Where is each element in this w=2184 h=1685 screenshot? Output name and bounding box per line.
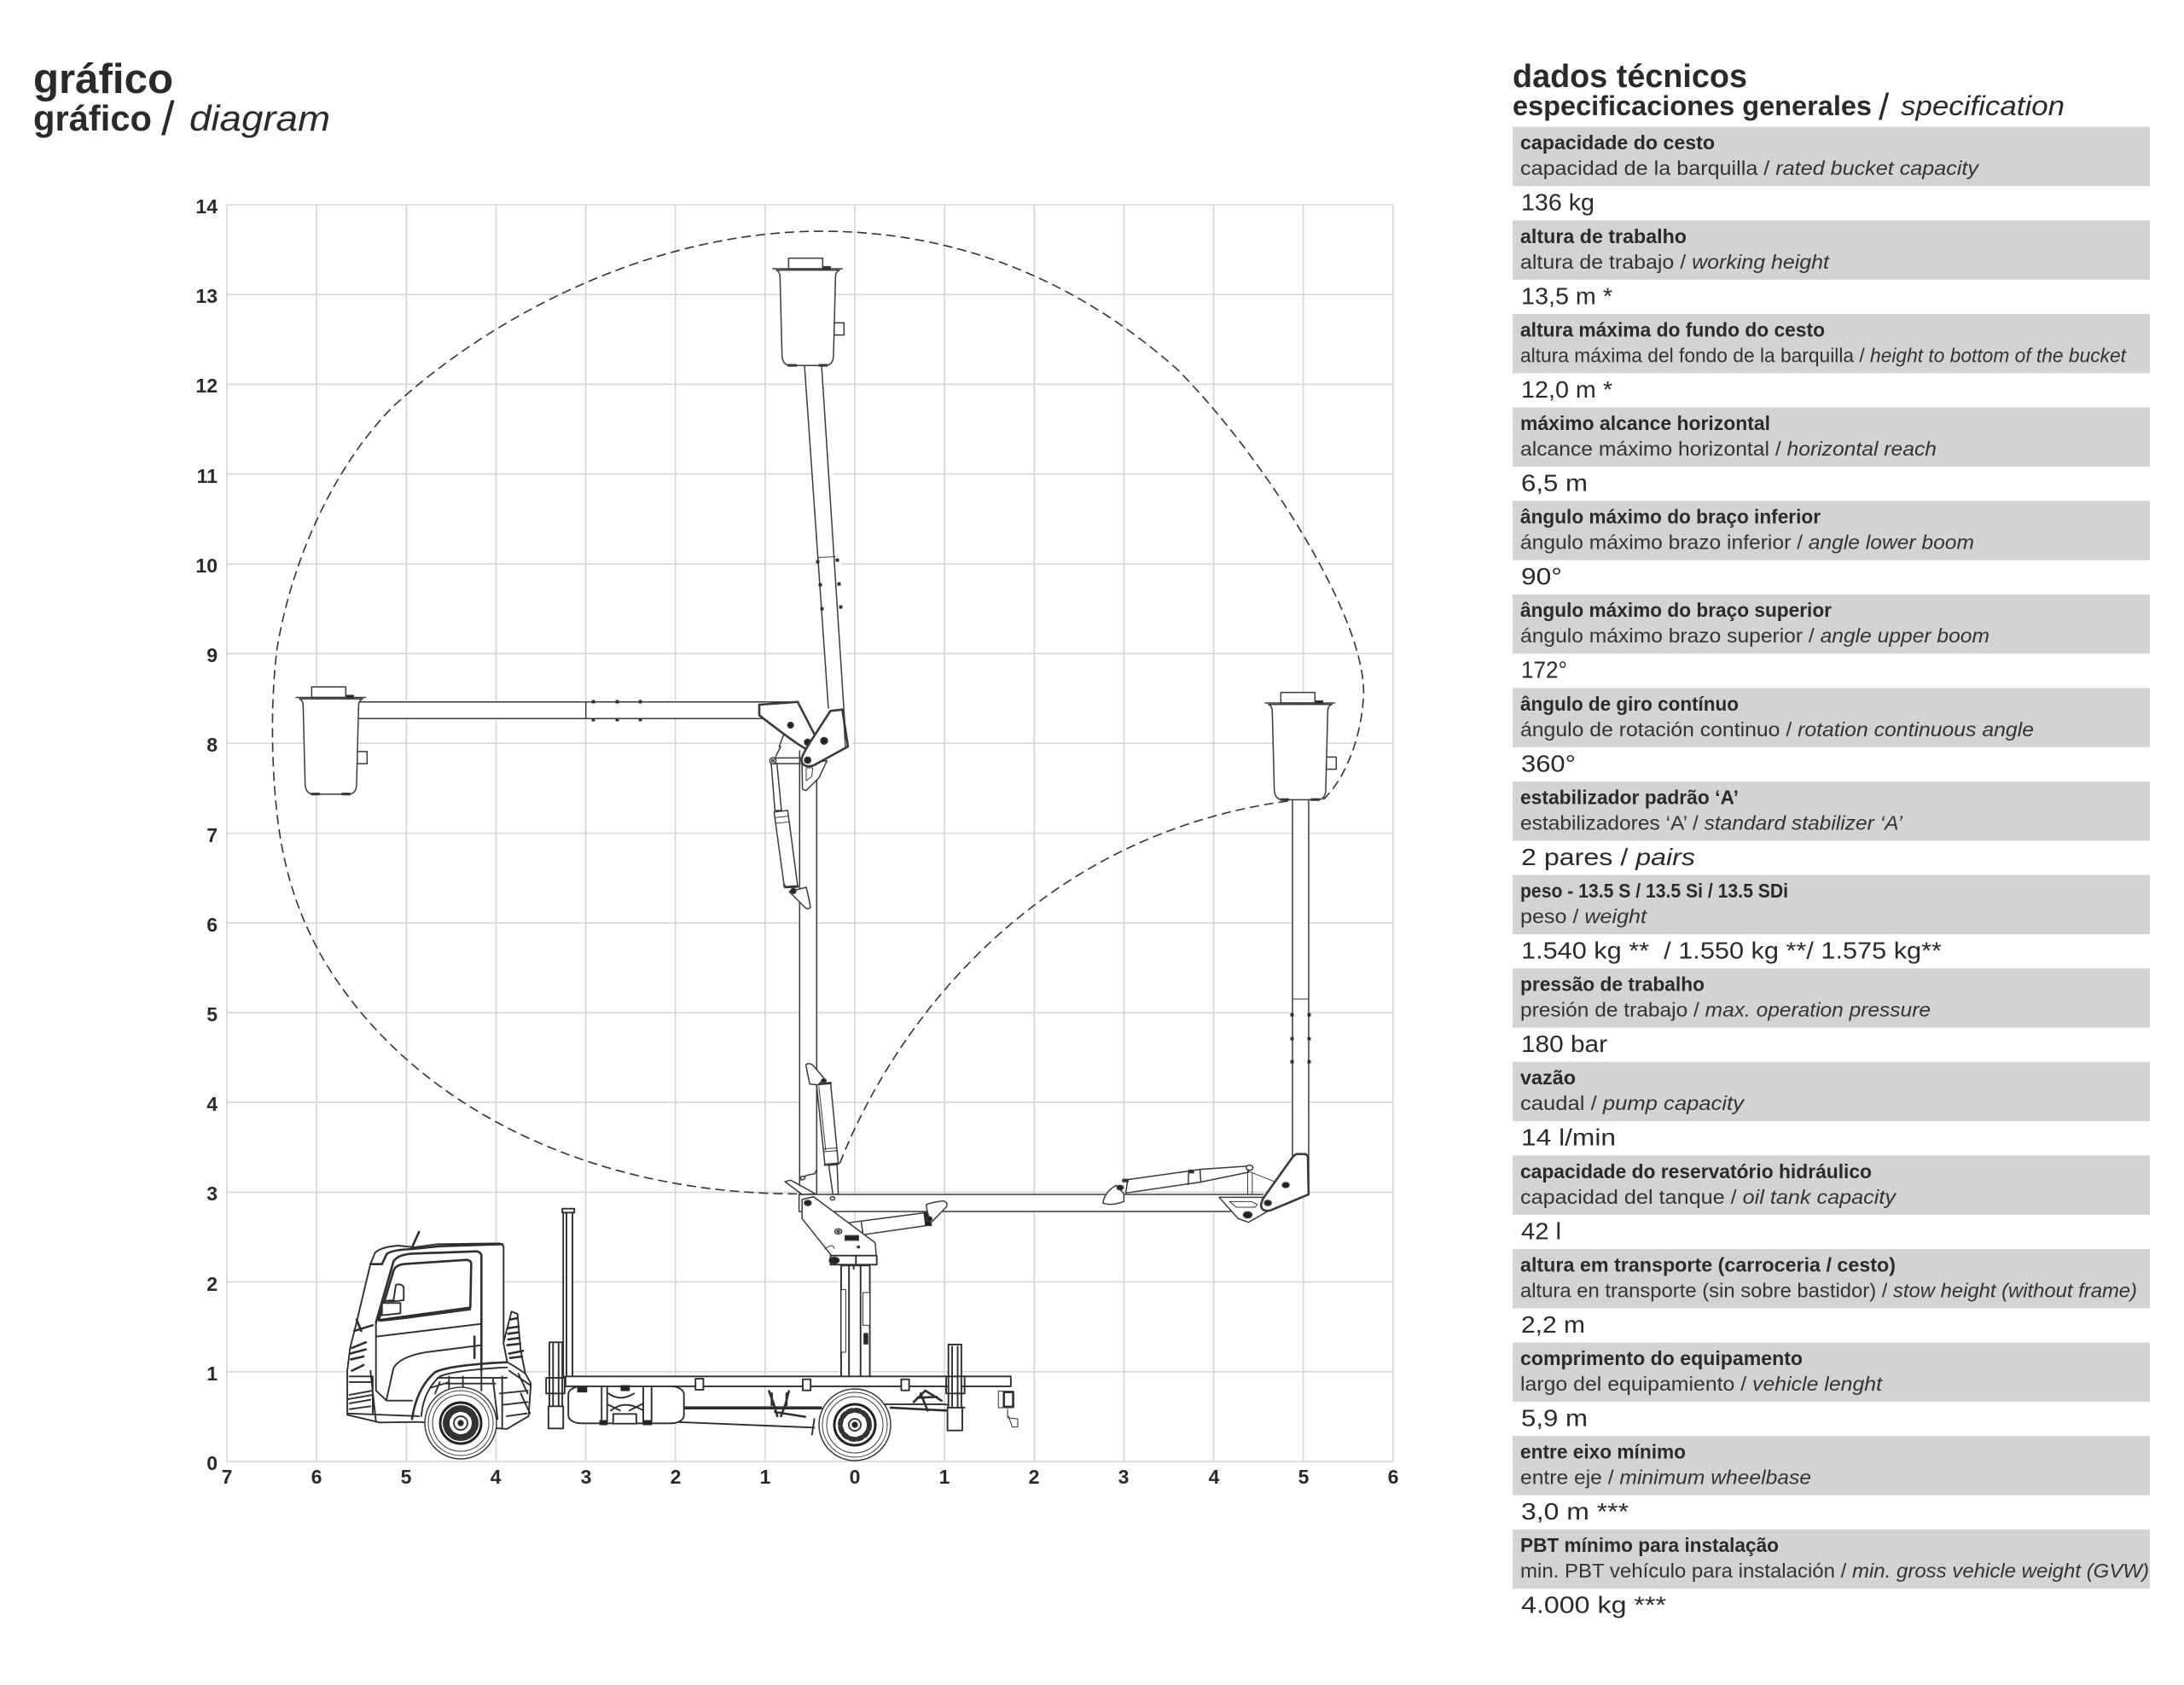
- y axis labels: 0: [206, 1452, 218, 1474]
- row: ângulo máximo do braço inferior: ángulo máximo brazo inferior / angle lower boom: [1520, 532, 1974, 554]
- x axis labels: 0: [850, 1466, 860, 1488]
- row: PBT mínimo para instalação: [1513, 1530, 2150, 1618]
- row: máximo alcance horizontal: [1513, 408, 2150, 497]
- row: capacidade do reservatório hidráulico: capacidad del tanque / oil tank capacity: [1520, 1186, 1897, 1208]
- row: altura de trabalho: [1513, 220, 2150, 309]
- row: altura máxima do fundo do cesto: [1513, 314, 2150, 403]
- specification table: [1513, 127, 2150, 1618]
- mast cylinder: [800, 1064, 839, 1194]
- x axis labels: 5: [401, 1466, 412, 1488]
- row: vazão: vazão: [1520, 1066, 1576, 1089]
- row: capacidade do reservatório hidráulico: [1513, 1155, 2150, 1244]
- truck: [347, 1209, 1018, 1435]
- heading: diagram: diagram: [189, 98, 330, 138]
- dashed reach envelope: [272, 231, 1363, 1194]
- row: vazão: [1513, 1062, 2150, 1151]
- bucket right: [1265, 693, 1336, 800]
- row: comprimento do equipamento: 5,9 m: [1521, 1404, 1588, 1432]
- x axis labels: 4: [1209, 1466, 1220, 1488]
- bucket top: [773, 259, 844, 366]
- plate right: [801, 710, 848, 766]
- chart: working range diagram: [195, 195, 1398, 1488]
- row: estabilizador padrão: [1513, 781, 2150, 870]
- rear stabilizer: [946, 1345, 965, 1431]
- right bucket position: [1265, 693, 1336, 1190]
- row: pressão de trabalho: presión de trabajo / max. operation pressure: [1520, 999, 1931, 1021]
- row: estabilizador padrão: estabilizadores ‘A’ / standard stabilizer ‘A’: [1520, 811, 1903, 834]
- row: altura máxima do fundo do cesto: 12,0 m *: [1521, 376, 1612, 403]
- turret link plate: [802, 1197, 876, 1257]
- row: ângulo máximo do braço inferior: 90°: [1521, 563, 1562, 590]
- y axis labels: 4: [206, 1093, 218, 1115]
- main horizontal arm: [785, 1180, 1265, 1211]
- y axis labels: 2: [206, 1273, 218, 1295]
- triangular bracket: [802, 761, 827, 791]
- row: ângulo máximo do braço inferior: [1513, 501, 2150, 590]
- row: vazão: caudal / pump capacity: [1520, 1092, 1745, 1114]
- y axis labels: 10: [195, 555, 218, 577]
- heading: diagram: [33, 56, 330, 145]
- row: comprimento do equipamento: comprimento do equipamento: [1520, 1347, 1803, 1369]
- stabilizer column: [562, 1209, 574, 1377]
- y axis labels: 1: [206, 1363, 218, 1385]
- heading: specification: specification: [1901, 90, 2065, 121]
- row: estabilizador padrão: 2 pares / pairs: [1521, 844, 1695, 870]
- y axis labels: 14: [195, 195, 218, 218]
- row: máximo alcance horizontal: máximo alcance horizontal: [1520, 412, 1770, 434]
- row: vazão: 14 l/min: [1521, 1124, 1616, 1151]
- row: altura de trabalho: altura de trabajo / working height: [1520, 251, 1831, 273]
- y axis labels: [195, 195, 218, 1474]
- y axis labels: 11: [197, 465, 218, 487]
- row: PBT mínimo para instalação: 4.000 kg ***: [1521, 1592, 1666, 1618]
- row: PBT mínimo para instalação: PBT mínimo para instalação: [1520, 1534, 1779, 1556]
- x axis labels: 6: [1388, 1466, 1398, 1488]
- y axis labels: 12: [195, 375, 218, 397]
- row: pressão de trabalho: [1513, 968, 2150, 1057]
- y axis labels: 8: [206, 734, 218, 756]
- row: PBT mínimo para instalação: min. PBT vehículo para instalación / min. gross vehicle weight (GVW): [1520, 1560, 2149, 1582]
- row: ângulo de giro contínuo: ángulo de rotación continuo / rotation continuous angle: [1520, 718, 2034, 741]
- bucket left: [296, 687, 367, 794]
- row: peso: peso - 13.5 S / 13.5 Si / 13.5 SDi: [1520, 880, 1788, 902]
- row: ângulo máximo do braço superior: ángulo máximo brazo superior / angle upper boom: [1520, 625, 1989, 647]
- cylinder upper: [770, 735, 810, 909]
- row: ângulo máximo do braço superior: ângulo máximo do braço superior: [1520, 599, 1832, 621]
- lower mast: [799, 751, 816, 1194]
- heading: diagram: gráfico: [33, 56, 173, 102]
- x axis labels: 4: [491, 1466, 502, 1488]
- row: estabilizador padrão: estabilizador padrão ‘A’: [1520, 786, 1739, 808]
- row: capacidade do reservatório hidráulico: 42 l: [1521, 1217, 1561, 1244]
- heading: diagram: gráfico: [33, 98, 152, 138]
- row: entre eixo mínimo: [1513, 1436, 2150, 1525]
- row: ângulo de giro contínuo: [1513, 688, 2150, 776]
- row: ângulo máximo do braço superior: 172°: [1521, 657, 1567, 683]
- x axis labels: 1: [760, 1466, 771, 1488]
- vertical arm: [1291, 768, 1310, 1190]
- central joint and boom cylinder: [759, 702, 848, 909]
- plate left: [759, 702, 816, 749]
- row: altura de trabalho: altura de trabalho: [1520, 225, 1687, 247]
- lower cylinder: [848, 1201, 947, 1235]
- lower boom and linkage: [785, 1064, 1309, 1257]
- row: capacidade do cesto: 136 kg: [1521, 189, 1594, 216]
- x axis labels: 5: [1298, 1466, 1310, 1488]
- heading: specification: [1513, 59, 2065, 128]
- rear wheel: [819, 1389, 891, 1461]
- row: altura máxima do fundo do cesto: altura máxima del fondo de la barquilla / height to bottom of the bucket: [1520, 344, 2128, 366]
- row: capacidade do cesto: capacidade do cesto: [1520, 131, 1715, 154]
- row: pressão de trabalho: pressão de trabalho: [1520, 973, 1705, 996]
- x axis labels: 7: [222, 1466, 232, 1488]
- horizontal boom: [359, 700, 802, 721]
- row: altura em transporte: altura en transporte (sin sobre bastidor) / stow height (without frame): [1520, 1279, 2137, 1301]
- y axis labels: 7: [206, 824, 218, 846]
- heading: specification: especificaciones generales: [1513, 90, 1872, 121]
- row: entre eixo mínimo: entre eixo mínimo: [1520, 1441, 1686, 1463]
- y axis labels: 13: [195, 285, 218, 307]
- x axis labels: 6: [311, 1466, 322, 1488]
- row: pressão de trabalho: 180 bar: [1521, 1031, 1607, 1057]
- row: peso: 1.540 kg ** / 1.550 kg **/ 1.575 kg**: [1521, 937, 1942, 964]
- row: altura em transporte: altura em transporte (carroceria / cesto): [1520, 1253, 1896, 1275]
- row: capacidade do cesto: capacidad de la barquilla / rated bucket capacity: [1520, 157, 1980, 179]
- heading: specification: dados técnicos: [1513, 59, 1747, 95]
- row: entre eixo mínimo: entre eje / minimum wheelbase: [1520, 1467, 1811, 1489]
- suspension hangers: [769, 1391, 942, 1435]
- row: capacidade do cesto: [1513, 127, 2150, 216]
- fuel tank: [568, 1386, 684, 1425]
- x axis labels: 3: [581, 1466, 591, 1488]
- row: capacidade do reservatório hidráulico: capacidade do reservatório hidráulico: [1520, 1160, 1872, 1182]
- chart grid: [227, 205, 1393, 1461]
- row: peso: peso / weight: [1520, 905, 1648, 927]
- y axis labels: 9: [206, 644, 218, 666]
- row: entre eixo mínimo: 3,0 m ***: [1521, 1498, 1629, 1525]
- lower right triangle plate: [1219, 1197, 1268, 1223]
- cab: [347, 1232, 531, 1429]
- y axis labels: 6: [206, 914, 218, 936]
- top bucket position: [773, 259, 853, 759]
- row: máximo alcance horizontal: 6,5 m: [1521, 469, 1588, 497]
- x axis labels: [222, 1466, 1398, 1488]
- row: ângulo máximo do braço inferior: ângulo máximo do braço inferior: [1520, 506, 1821, 528]
- row: altura em transporte: [1513, 1249, 2150, 1338]
- row: peso: [1513, 875, 2150, 964]
- upper boom vertical: [804, 365, 853, 759]
- horizontal cylinder: [1103, 1165, 1275, 1205]
- front stabilizer: [546, 1342, 565, 1428]
- row: comprimento do equipamento: largo del equipamiento / vehicle lenght: [1520, 1373, 1884, 1395]
- heading: diagram: /: [161, 91, 175, 145]
- row: ângulo máximo do braço superior: [1513, 595, 2150, 683]
- heading: specification: /: [1879, 86, 1890, 128]
- chassis frame: [566, 1376, 1018, 1427]
- pedestal: [829, 1256, 877, 1377]
- right joint plate: [1261, 1154, 1309, 1211]
- x axis labels: 1: [939, 1466, 950, 1488]
- row: altura máxima do fundo do cesto: altura máxima do fundo do cesto: [1520, 318, 1825, 340]
- row: altura em transporte: 2,2 m: [1521, 1311, 1585, 1338]
- row: ângulo de giro contínuo: ângulo de giro contínuo: [1520, 693, 1739, 715]
- y axis labels: 5: [206, 1003, 218, 1026]
- row: comprimento do equipamento: [1513, 1343, 2150, 1432]
- x axis labels: 3: [1118, 1466, 1129, 1488]
- x axis labels: 2: [671, 1466, 681, 1488]
- row: ângulo de giro contínuo: 360°: [1521, 750, 1576, 776]
- y axis labels: 3: [206, 1182, 218, 1205]
- row: máximo alcance horizontal: alcance máximo horizontal / horizontal reach: [1520, 438, 1937, 460]
- left bucket position: [296, 687, 802, 794]
- x axis labels: 2: [1029, 1466, 1039, 1488]
- front wheel: [425, 1387, 497, 1459]
- row: altura de trabalho: 13,5 m *: [1521, 282, 1612, 309]
